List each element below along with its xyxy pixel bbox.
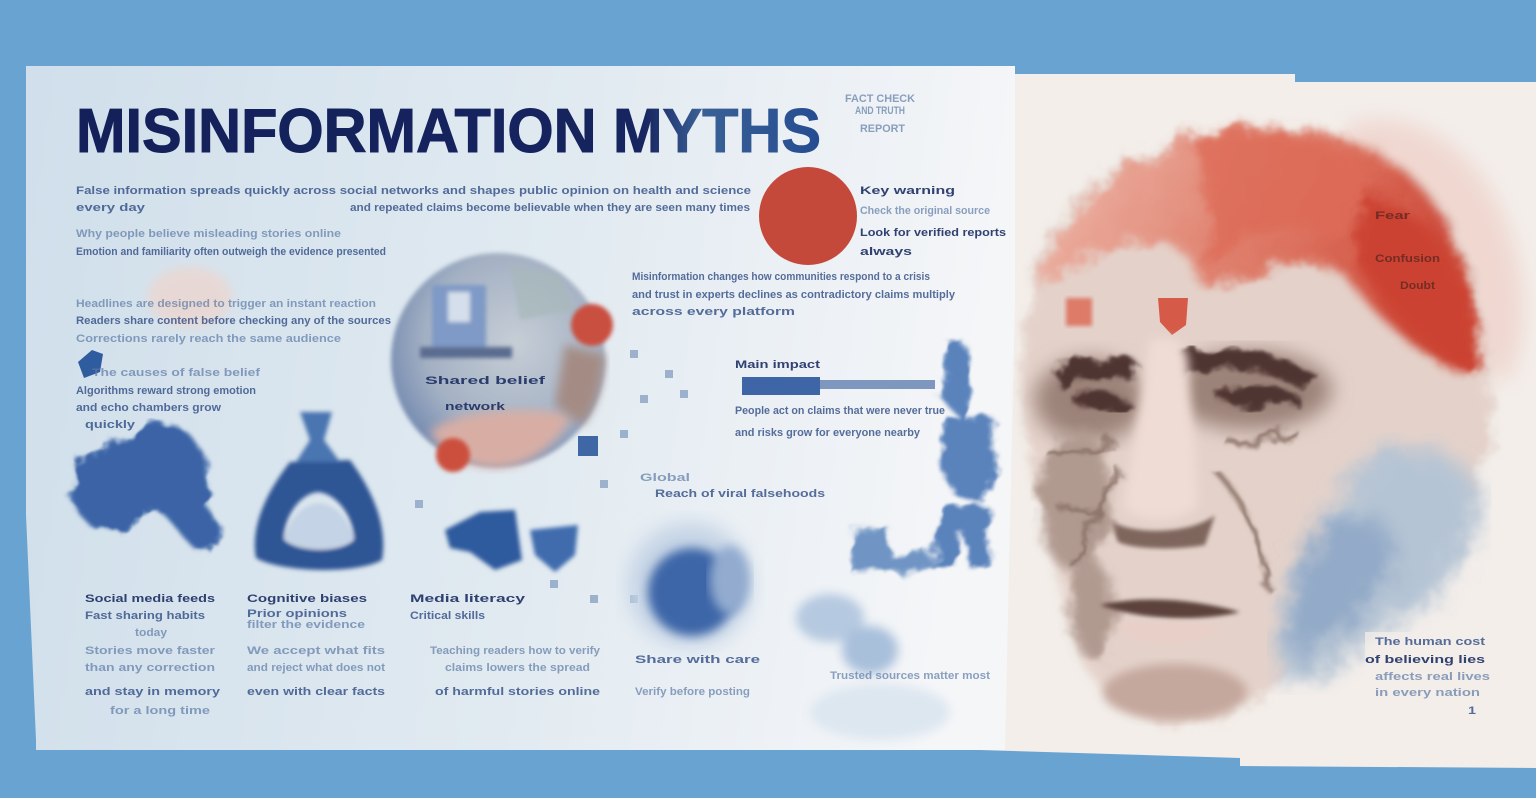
section text: causes	[76, 367, 260, 431]
portrait: mouth	[1100, 600, 1240, 644]
column 2 text: We accept what fits	[247, 645, 385, 657]
text beside red circle	[860, 185, 1006, 258]
column 4 text: Share with care	[635, 654, 760, 666]
sphere: red dot top	[571, 304, 613, 346]
portrait caption	[1365, 632, 1493, 718]
column 3 text: Critical skills	[410, 610, 485, 622]
column 4 text	[635, 654, 990, 698]
column 1 text	[85, 593, 221, 717]
icon: blue ring with knot	[255, 412, 383, 570]
column 1 text: than any correction	[85, 662, 215, 674]
column 4 text: Trusted sources matter most	[830, 670, 990, 682]
portrait: pale halo	[1345, 119, 1524, 385]
sphere: right warm shade	[555, 345, 605, 425]
portrait: small labels on temple: Doubt	[1400, 280, 1435, 292]
portrait: nose highlight	[1124, 338, 1198, 519]
portrait caption: in every nation	[1375, 687, 1480, 699]
column 4 text: Verify before posting	[635, 686, 750, 698]
column 3 text: Media literacy	[410, 593, 526, 605]
icon: twin blue map pieces	[445, 510, 578, 572]
intro text block: Emotion and familiarity often outweigh the evidence presented	[76, 246, 386, 258]
small top-right caption	[845, 93, 915, 135]
text: figure heading and bar: People act on claims that were never true	[735, 405, 945, 417]
section text: causes: Algorithms reward strong emotion	[76, 385, 256, 397]
intro text block: False information spreads quickly across social networks and shapes public opinion on health and science	[76, 185, 751, 197]
text: globe heading	[640, 472, 825, 500]
text: globe heading: Reach of viral falsehoods	[655, 488, 825, 500]
central text block	[632, 271, 956, 318]
text beside red circle: Look for verified reports	[860, 227, 1006, 239]
highlight bar	[742, 377, 820, 395]
text beside red circle: Key warning	[860, 185, 955, 197]
column 2 text: Cognitive biases	[247, 593, 367, 605]
column 3 text: claims lowers the spread	[445, 662, 590, 674]
small top-right caption: AND TRUTH	[855, 105, 905, 117]
column 3 text: of harmful stories online	[435, 686, 600, 698]
central sphere illustration: network	[445, 401, 506, 413]
section text: causes: and echo chambers grow	[76, 402, 221, 414]
central sphere illustration	[391, 253, 613, 472]
red circle	[759, 167, 857, 265]
text: figure heading and bar	[735, 359, 945, 439]
text: figure heading and bar: Main impact	[735, 359, 820, 371]
text: figure heading and bar: and risks grow for everyone nearby	[735, 427, 921, 439]
portrait caption: 1	[1468, 705, 1476, 717]
text beside red circle: always	[860, 246, 912, 258]
illustration: pale world wash	[796, 594, 950, 740]
column 3 text: Teaching readers how to verify	[430, 645, 601, 657]
portrait: chin shade	[1103, 664, 1247, 720]
column 2 text: and reject what does not	[247, 662, 385, 674]
text beside red circle: Check the original source	[860, 205, 990, 217]
panel: right portrait paper	[980, 74, 1536, 768]
section text: causes: The causes of false belief	[92, 367, 260, 379]
illustration: walking blue figure	[850, 345, 998, 570]
portrait caption: affects real lives	[1375, 671, 1490, 683]
column 1 text: Stories move faster	[85, 645, 216, 657]
portrait: head base	[1022, 128, 1493, 724]
portrait: small labels on temple: Confusion	[1375, 253, 1440, 265]
portrait caption: The human cost	[1375, 636, 1485, 648]
central text block: across every platform	[632, 306, 795, 318]
column 1 text: and stay in memory	[85, 686, 221, 698]
intro text block: Why people believe misleading stories online	[76, 228, 341, 240]
left text block: Readers share content before checking any of the sources	[76, 315, 391, 327]
column 1 text: Social media feeds	[85, 593, 215, 605]
left text block: Headlines are designed to trigger an instant reaction	[76, 298, 376, 310]
portrait caption: of believing lies	[1365, 654, 1485, 666]
central text block: and trust in experts declines as contradictory claims multiply	[632, 289, 956, 301]
icon: small blue marker	[78, 350, 103, 378]
column 2 text	[247, 593, 385, 698]
text: globe heading: Global	[640, 472, 690, 484]
icon: blue globe	[628, 523, 752, 647]
portrait: nose shadow	[1110, 515, 1215, 548]
portrait: small labels on temple	[1375, 210, 1440, 292]
portrait: deep red right temple	[1358, 195, 1476, 375]
panel: left infographic sheet	[26, 66, 1015, 750]
portrait: shaded eye sockets	[1034, 350, 1332, 442]
column 3 text	[410, 593, 601, 698]
portrait: blue wash	[1277, 444, 1481, 683]
portrait: red scalp wash	[1040, 128, 1478, 378]
portrait: mid red crown	[1195, 130, 1375, 270]
sphere: caption: Shared belief	[425, 375, 546, 387]
small top-right caption: FACT CHECK	[845, 93, 915, 105]
left text block: Corrections rarely reach the same audience	[76, 333, 341, 345]
intro text block	[76, 185, 751, 258]
central text block: Misinformation changes how communities respond to a crisis	[632, 271, 930, 283]
left text block	[76, 298, 391, 345]
sphere: lower warm tone	[430, 410, 572, 468]
scattered data dots	[415, 350, 688, 603]
small top-right caption: REPORT	[860, 123, 905, 135]
column 2 text: filter the evidence	[247, 619, 365, 631]
portrait: red forehead marks	[1066, 298, 1188, 335]
column 2 text: Prior opinions	[247, 608, 347, 620]
portrait: wrinkled cheeks	[1039, 428, 1295, 658]
intro text block: and repeated claims become believable when they are seen many times	[350, 202, 750, 214]
pale red accent behind text	[148, 267, 232, 327]
section text: causes: quickly	[85, 419, 136, 431]
column 1 text: for a long time	[110, 705, 210, 717]
sphere: person silhouette	[420, 265, 575, 358]
column 2 text: even with clear facts	[247, 686, 385, 698]
title: MISINFORMATION MYTHS	[76, 97, 821, 166]
portrait: small labels on temple: Fear	[1375, 210, 1411, 222]
column 1 text: today	[135, 627, 168, 639]
icon: blue map blob	[70, 424, 219, 550]
intro text block: every day	[76, 202, 146, 214]
portrait: brows and eyes	[1055, 349, 1320, 409]
sphere: red dot bottom	[436, 438, 470, 472]
column 1 text: Fast sharing habits	[85, 610, 205, 622]
sphere: satellite node	[578, 436, 598, 456]
portrait illustration	[1022, 119, 1524, 724]
